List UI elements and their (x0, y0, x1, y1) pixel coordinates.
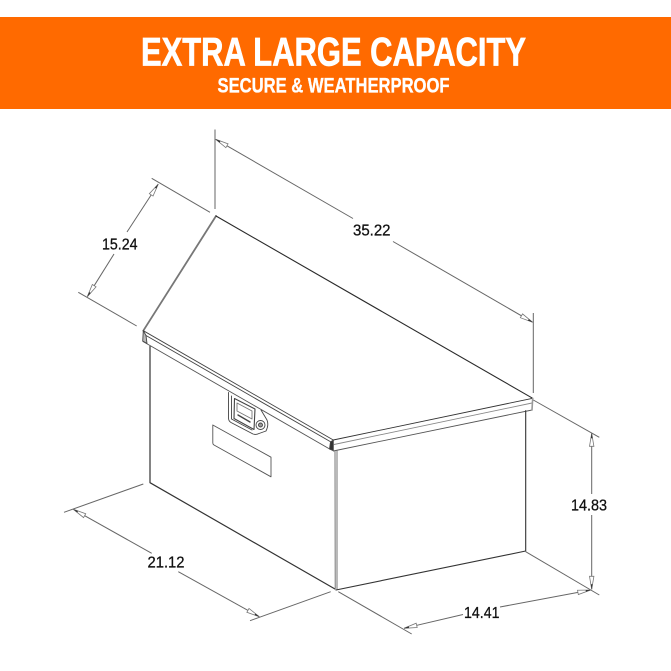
dimension: 14.41 (338, 590, 591, 634)
dimension: 35.22 (215, 130, 533, 393)
label 14.83: 14.83 (571, 498, 607, 514)
toolbox drawing (143, 216, 533, 590)
label 14.41: 14.41 (464, 605, 500, 622)
title: EXTRA LARGE CAPACITY (141, 30, 526, 74)
front corner edge (335, 451, 337, 589)
front panel (150, 346, 335, 589)
dimension: 15.24 (78, 178, 210, 326)
label 35.22: 35.22 (353, 222, 391, 240)
label 15.24: 15.24 (102, 236, 138, 254)
lid top (143, 216, 533, 440)
banner background (0, 17, 671, 109)
label 21.12: 21.12 (148, 554, 185, 572)
front lid rail (143, 331, 333, 451)
side panel (336, 411, 526, 590)
dimension: 14.83 (526, 400, 607, 595)
banner (0, 17, 671, 109)
latch (228, 392, 268, 434)
dimension: 21.12 (64, 484, 331, 621)
name plate recess (213, 425, 271, 477)
side lid rail (333, 398, 533, 451)
subtitle: SECURE & WEATHERPROOF (218, 74, 450, 98)
